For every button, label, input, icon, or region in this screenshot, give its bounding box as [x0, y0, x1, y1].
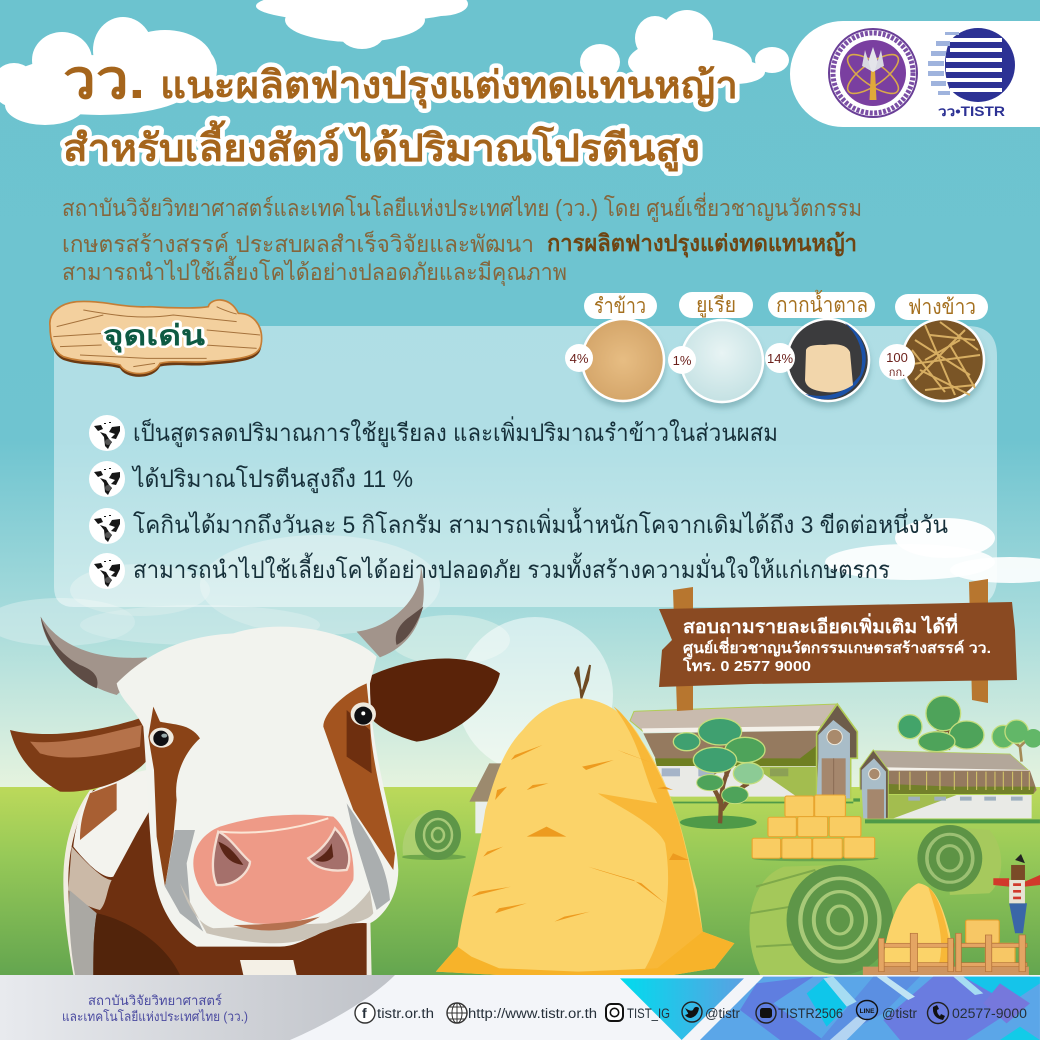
barn: main — [630, 704, 860, 803]
ingredient: rice bran: รำข้าว — [594, 295, 646, 318]
youtube — [756, 1003, 843, 1023]
tree: far right — [992, 720, 1040, 762]
bullet 3: โคกินได้มากถึงวันละ 5 กิโลกรัม สามารถเพิ่มน้ำหนักโคจากเดิมได้ถึง 3 ขีดต่อหนึ่งวัน — [133, 507, 948, 539]
tree: back right — [898, 696, 984, 752]
cloud: top left — [0, 17, 217, 125]
cow left eye — [150, 728, 174, 748]
twitter: @tistr — [705, 1006, 740, 1021]
farm scene — [436, 665, 1040, 975]
bullet 4 — [89, 552, 890, 589]
title: วว. — [63, 50, 145, 110]
logo: TISTR — [925, 25, 1015, 119]
ingredient: urea: ยูเรีย — [696, 294, 736, 318]
ingredient: molasses: กากน้ำตาล — [776, 290, 868, 317]
phone: 02577-9000 — [952, 1006, 1027, 1021]
barn: right — [860, 750, 1040, 823]
wooden badge: highlights: จุดเด่น — [103, 320, 205, 353]
cow left ear — [10, 716, 150, 792]
content panel — [54, 326, 997, 607]
footer blue diamonds — [620, 977, 1040, 1040]
cow right ear — [368, 659, 500, 742]
bullet 4: สามารถนำไปใช้เลี้ยงโคได้อย่างปลอดภัย รวมทั้งสร้างความมั่นใจให้แก่เกษตรกร — [133, 552, 890, 584]
line: LINE — [860, 1008, 875, 1015]
ingredient: straw: ฟางข้าว — [908, 296, 976, 319]
bullet 1 — [89, 415, 778, 451]
green bale: behind — [917, 825, 1001, 895]
youtube: TISTR2506 — [778, 1006, 843, 1021]
ingredient: rice bran — [565, 293, 664, 401]
intro paragraph: สถาบันวิจัยวิทยาศาสตร์และเทคโนโลยีแห่งประเทศไทย (วว.) โดย ศูนย์เชี่ยวชาญนวัตกรรม — [62, 192, 862, 222]
cow right horn — [357, 565, 424, 657]
footer grey swoosh — [0, 975, 395, 1040]
contact sign: โทร. 0 2577 9000 — [682, 656, 811, 675]
clouds: horizon — [0, 518, 1040, 773]
footer band — [0, 975, 1040, 1040]
ingredient: molasses — [765, 290, 875, 401]
phone — [928, 1002, 1027, 1024]
cow head — [117, 627, 398, 947]
cow — [10, 565, 500, 975]
intro paragraph — [62, 192, 862, 286]
green bale: near cow — [402, 810, 466, 860]
barns and trees — [630, 696, 1040, 829]
cow right eye — [351, 702, 376, 726]
haystack: main — [436, 665, 734, 975]
cow nostrils — [213, 832, 250, 885]
cow muzzle — [193, 815, 354, 930]
logo pill — [790, 21, 1040, 127]
instagram — [606, 1004, 670, 1021]
website — [447, 1003, 597, 1023]
sky background — [0, 0, 1040, 800]
cloud: top centre — [256, 0, 468, 49]
footer institute name: และเทคโนโลยีแห่งประเทศไทย (วว.) — [62, 1009, 248, 1024]
facebook: f — [362, 1005, 367, 1021]
ingredient: straw: 100 — [886, 350, 908, 365]
intro paragraph: เกษตรสร้างสรรค์ ประสบผลสำเร็จวิจัยและพัฒนา — [62, 229, 534, 257]
haystack: small — [883, 883, 954, 967]
cloud: top right — [580, 10, 789, 86]
footer institute name: สถาบันวิจัยวิทยาศาสตร์ — [88, 993, 222, 1008]
website: http://www.tistr.or.th — [468, 1006, 597, 1021]
hay cubes: small — [966, 920, 1015, 968]
line: @tistr — [882, 1006, 917, 1021]
tree: front — [673, 718, 765, 829]
ingredient: urea — [668, 292, 763, 402]
wooden badge: highlights — [50, 300, 262, 377]
green bale: large — [749, 865, 893, 975]
title: แนะผลิตฟางปรุงแต่งทดแทนหญ้า — [160, 65, 738, 109]
wooden fence — [863, 933, 1029, 975]
line — [856, 1000, 917, 1021]
ground — [0, 787, 1040, 977]
cow right patch — [323, 683, 395, 870]
title — [63, 50, 738, 172]
bullet 3 — [89, 507, 948, 544]
scarecrow — [993, 854, 1040, 933]
hay cube pyramid — [752, 795, 879, 861]
twitter — [682, 1002, 740, 1022]
bullet 2 — [89, 461, 413, 497]
highlight list — [89, 415, 948, 589]
contact sign: ศูนย์เชี่ยวชาญนวัตกรรมเกษตรสร้างสรรค์ วว. — [683, 637, 991, 658]
footer institute name — [62, 993, 248, 1024]
barn: far left — [469, 763, 515, 833]
bullet 2: ได้ปริมาณโปรตีนสูงถึง 11 % — [131, 465, 413, 494]
instagram: TIST_IG — [627, 1006, 670, 1021]
cow shaded cheek — [347, 803, 390, 910]
ingredient: urea: 1% — [673, 353, 692, 368]
facebook — [355, 1003, 434, 1023]
logo: TISTR: วว•TISTR — [938, 104, 1005, 119]
bullet 1: เป็นสูตรลดปริมาณการใช้ยูเรียลง และเพิ่มปริมาณรำข้าวในส่วนผสม — [133, 416, 778, 448]
cow left patch — [148, 707, 200, 887]
footer contacts — [355, 1000, 1027, 1024]
ingredient: straw — [879, 294, 988, 401]
ingredient: straw: กก. — [889, 367, 905, 379]
facebook: tistr.or.th — [377, 1006, 434, 1021]
ingredient: rice bran: 4% — [570, 351, 589, 366]
contact sign — [659, 579, 1017, 711]
cow body — [63, 770, 372, 975]
title: สำหรับเลี้ยงสัตว์ ได้ปริมาณโปรตีนสูง — [63, 120, 700, 172]
intro paragraph: สามารถนำไปใช้เลี้ยงโคได้อย่างปลอดภัยและมีคุณภาพ — [62, 256, 567, 286]
logo: institute seal — [829, 29, 917, 117]
cow left horn — [41, 617, 148, 695]
ingredient: molasses: 14% — [767, 351, 793, 366]
contact sign: สอบถามรายละเอียดเพิ่มเติม ได้ที่ — [683, 613, 958, 638]
intro paragraph: การผลิตฟางปรุงแต่งทดแทนหญ้า — [547, 230, 857, 258]
